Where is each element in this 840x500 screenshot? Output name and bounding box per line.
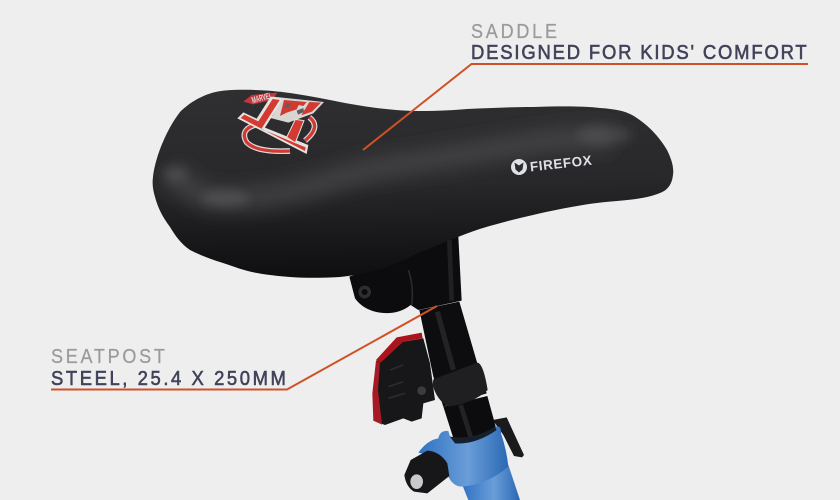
callout heading: seatpost: SEATPOST bbox=[51, 346, 165, 368]
logo ring bbox=[244, 117, 315, 151]
leader line: seatpost bbox=[51, 306, 437, 390]
clamp knob bbox=[404, 451, 449, 493]
clamp lever bbox=[493, 417, 524, 457]
logo: Avengers bbox=[237, 90, 324, 154]
blue seat clamp bbox=[418, 426, 508, 487]
saddle body bbox=[153, 90, 673, 278]
callout heading: saddle: SADDLE bbox=[471, 21, 557, 43]
callout: saddle bbox=[363, 21, 808, 150]
blue frame tube bbox=[462, 465, 520, 500]
logo A bar bbox=[237, 97, 308, 154]
seat clamp head bbox=[349, 237, 462, 313]
tail light lens bbox=[372, 333, 423, 425]
tail light fins bbox=[388, 365, 405, 398]
logo A leg bbox=[287, 119, 304, 143]
seat clamp opening bbox=[450, 427, 497, 443]
saddle highlights bbox=[163, 126, 633, 206]
logo Marvel tag: MARVEL bbox=[251, 90, 273, 105]
knob bolt bbox=[410, 474, 423, 489]
callout: seatpost bbox=[51, 306, 437, 390]
post band bbox=[433, 363, 488, 407]
seatpost upper section bbox=[419, 302, 487, 407]
logo letters bbox=[263, 97, 324, 123]
tail light bracket bolt bbox=[417, 386, 426, 395]
seatpost assembly bbox=[349, 237, 524, 500]
callout text: seatpost: STEEL, 25.4 X 250MM bbox=[51, 367, 286, 390]
callout text: saddle: DESIGNED FOR KIDS' COMFORT bbox=[471, 41, 807, 64]
seatpost lower section bbox=[443, 396, 497, 443]
tail light body bbox=[373, 338, 435, 425]
logo: Firefox: FIREFOX bbox=[529, 153, 592, 174]
saddle bbox=[153, 90, 673, 278]
leader line: saddle bbox=[363, 64, 808, 150]
clamp bolt bbox=[358, 286, 371, 298]
